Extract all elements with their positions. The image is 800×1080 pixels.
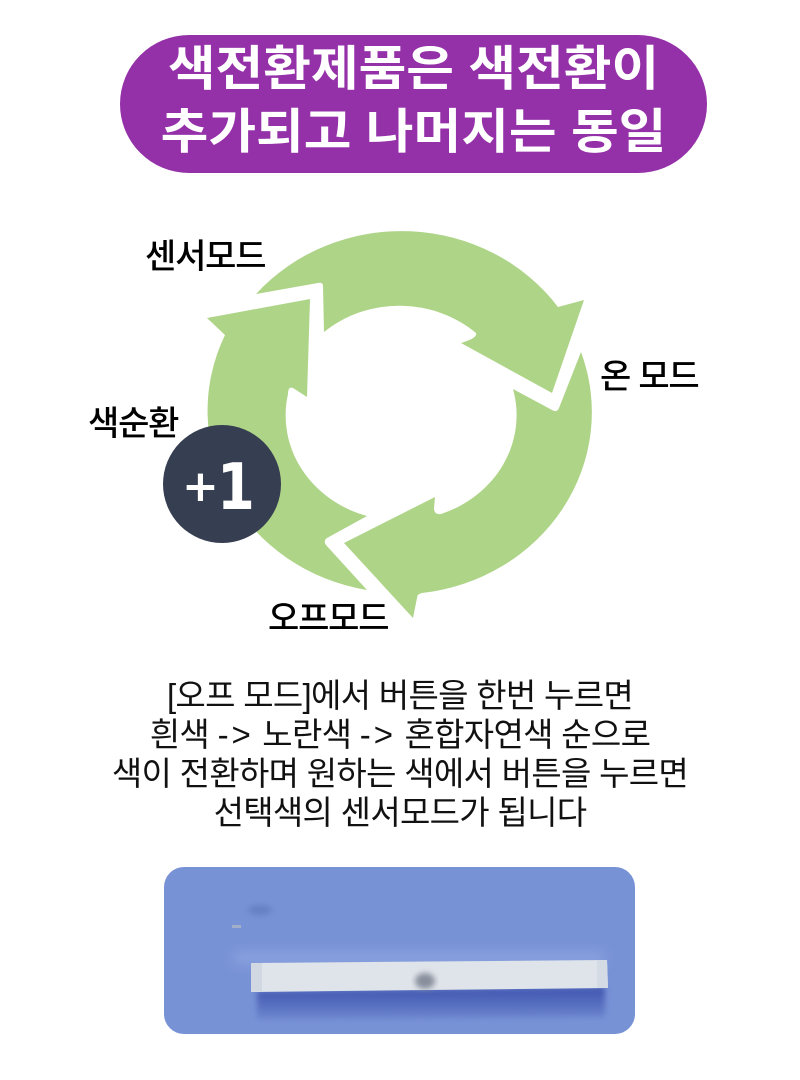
title text: 색전환제품은 색전환이 (168, 43, 659, 96)
label: sensor mode: 센서모드 (145, 238, 265, 276)
arrow: on to off (344, 352, 592, 618)
title text: 추가되고 나머지는 동일 (161, 106, 666, 159)
description text (112, 677, 688, 831)
description text: 색이 전환하며 원하는 색에서 버튼을 누르면 (112, 755, 688, 792)
description text: 선택색의 센서모드가 됩니다 (214, 794, 586, 831)
label: off mode: 오프모드 (268, 600, 388, 638)
description text: [오프 모드]에서 버튼을 한번 누르면 (167, 677, 633, 714)
photo: shadow (257, 987, 605, 1020)
photo: surface mark (232, 925, 241, 928)
title text (161, 43, 666, 159)
label: on mode: 온 모드 (600, 358, 698, 396)
product photo (164, 867, 635, 1034)
photo: surface smudge (248, 905, 272, 915)
description text: 흰색 -> 노란색 -> 혼합자연색 순으로 (150, 716, 650, 753)
badge: plus one (163, 425, 281, 543)
title banner (120, 35, 707, 173)
label: color cycle: 색순환 (88, 405, 178, 443)
arrow: off to sensor (207, 299, 367, 590)
icon: light bar (251, 960, 608, 992)
arrow: sensor to on (256, 231, 584, 393)
digit one: 1 (217, 451, 255, 525)
photo: glow above bar (234, 953, 604, 963)
plus sign: + (182, 461, 219, 512)
